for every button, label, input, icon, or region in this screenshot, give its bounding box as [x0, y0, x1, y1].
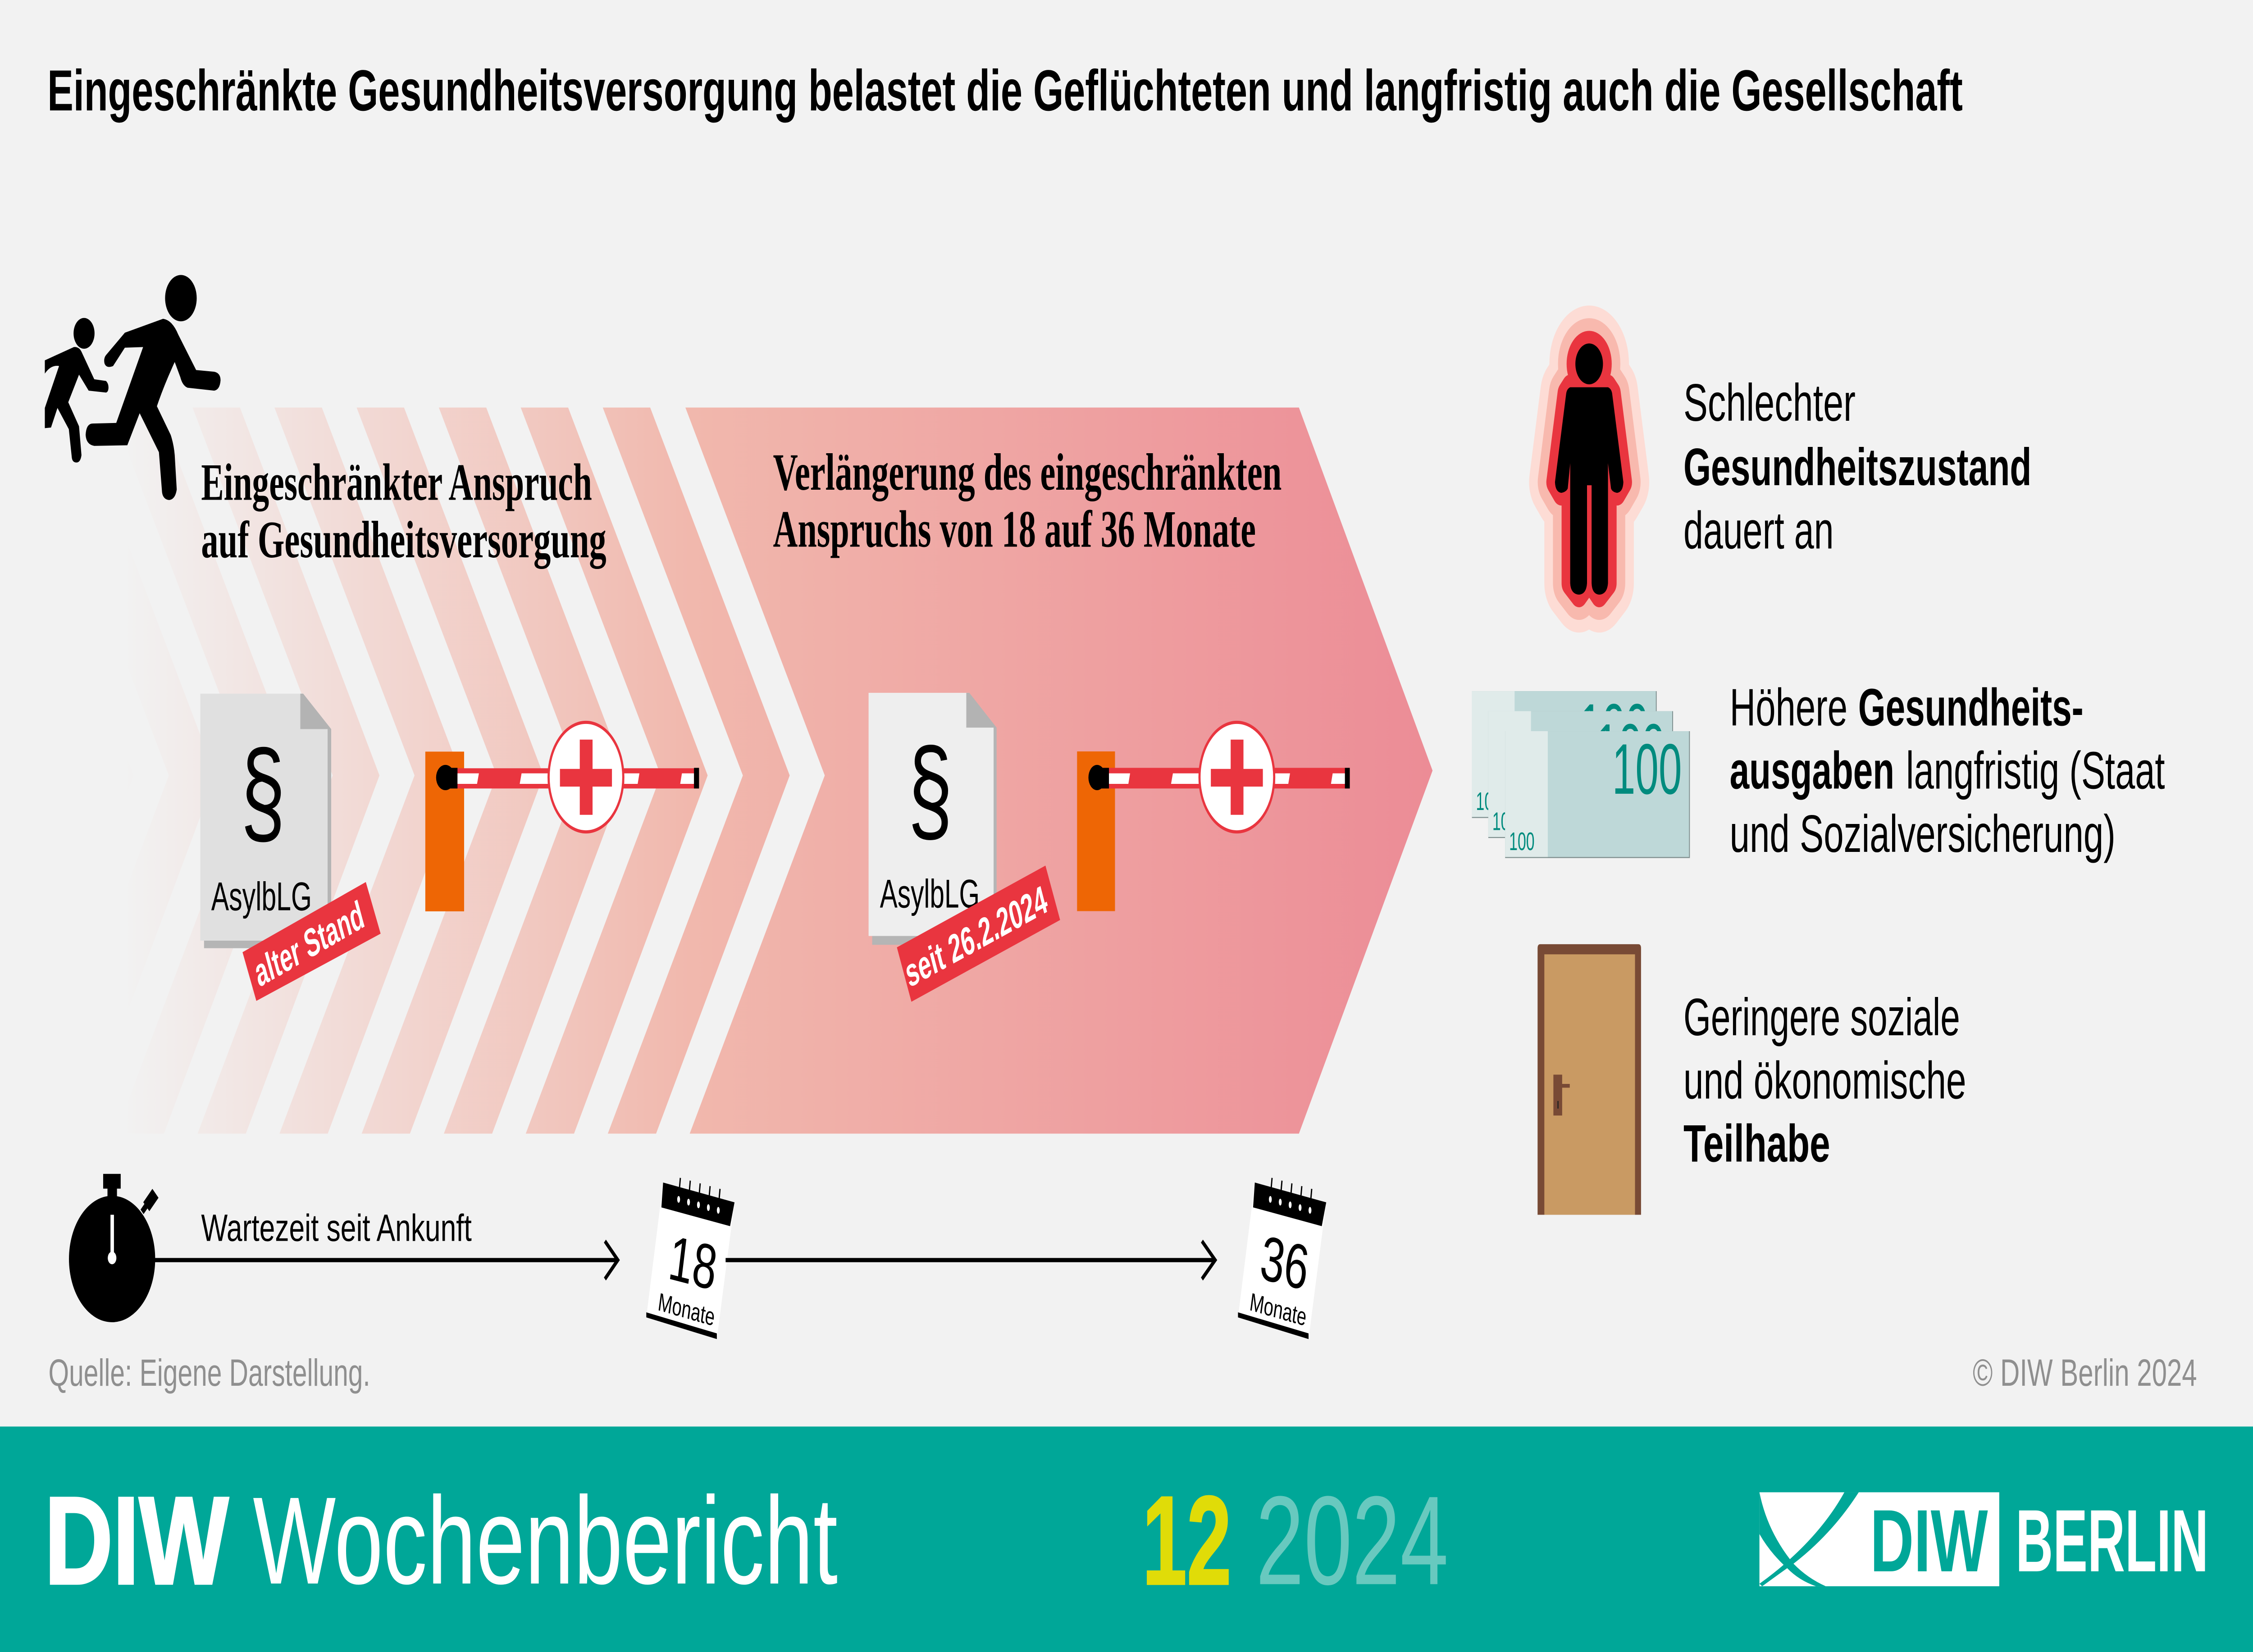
banknote front: 100 — [1509, 828, 1535, 856]
icon: barrier with red cross old — [425, 722, 699, 911]
text: social participation: Geringere soziale — [1683, 988, 1960, 1047]
main arrow: extension period — [685, 408, 1432, 1133]
issue number: 12 — [1142, 1470, 1231, 1611]
text: health expenditure — [1730, 678, 2165, 864]
text: social participation: und ökonomische — [1683, 1051, 1966, 1110]
text: social participation — [1683, 988, 1966, 1173]
logo: DIW Berlin — [1760, 1491, 2208, 1590]
heading: extension of restricted entitlement: Verlängerung des eingeschränkten — [773, 443, 1282, 501]
banknote front: 100 — [1612, 729, 1682, 809]
footer bar — [0, 1427, 2253, 1652]
year: 2024 — [1256, 1470, 1448, 1611]
icon: person with red glow — [1555, 343, 1624, 595]
text: health status — [1683, 373, 2031, 560]
banknote back: 100 — [1476, 788, 1501, 816]
banknote back — [1472, 689, 1657, 818]
icon: calendar 18 months: 18 — [665, 1222, 721, 1304]
text: social participation: Teilhabe — [1683, 1114, 1830, 1173]
text: health expenditure: Höhere — [1730, 678, 1847, 737]
icon: calendar 36 months: Monate — [1248, 1288, 1308, 1332]
heading: extension of restricted entitlement — [773, 443, 1282, 558]
icon: calendar 36 months: 36 — [1257, 1222, 1313, 1304]
text: health status: Schlechter — [1683, 373, 1856, 432]
copyright: © DIW Berlin 2024 — [1973, 1352, 2197, 1394]
icon: door — [1537, 944, 1641, 1215]
icon: calendar 36 months — [1238, 1178, 1326, 1339]
publication name: Wochenbericht — [253, 1471, 838, 1611]
banknote middle: 100 — [1492, 808, 1518, 836]
text: health expenditure: Gesundheits- — [1858, 678, 2084, 737]
icon: stopwatch — [69, 1174, 159, 1322]
label: waiting time: Wartezeit seit Ankunft — [201, 1207, 472, 1249]
icon: calendar 18 months: Monate — [657, 1288, 716, 1332]
heading: restricted entitlement: Eingeschränkter Anspruch — [201, 453, 592, 511]
heading: restricted entitlement: auf Gesundheitsversorgung — [201, 510, 607, 569]
banknote back: 100 — [1579, 689, 1649, 769]
banknote front — [1505, 729, 1690, 858]
icon: banknotes — [1472, 689, 1690, 858]
badge: seit 26.2.2024: seit 26.2.2024 — [901, 877, 1051, 996]
arrow: to 18 months — [151, 1241, 618, 1279]
icon: law document new — [869, 693, 997, 945]
text: health expenditure: und Sozialversicherung) — [1730, 805, 2116, 864]
title: Eingeschränkte Gesundheitsversorgung belastet die Geflüchteten und langfristig auch die Gesellschaft — [47, 58, 1963, 123]
arrow: to 36 months — [725, 1241, 1215, 1279]
banknote middle: 100 — [1595, 709, 1665, 789]
text: health status: Gesundheitszustand — [1683, 438, 2031, 497]
icon: law document new: AsylbLG — [880, 872, 980, 916]
badge: alter Stand: alter Stand — [250, 892, 368, 996]
icon: law document old — [201, 694, 331, 948]
text: health expenditure: ausgaben — [1730, 742, 1894, 800]
icon: fleeing adult and child — [45, 275, 220, 500]
source note: Quelle: Eigene Darstellung. — [48, 1352, 370, 1394]
icon: law document old: AsylbLG — [211, 874, 312, 919]
icon: barrier with red cross new — [1077, 722, 1350, 911]
chevron stripes: fading waiting period — [0, 408, 790, 1133]
heading: restricted entitlement — [201, 453, 607, 569]
publication name: DIW — [45, 1471, 228, 1611]
banknote middle — [1488, 709, 1673, 838]
text: health status: dauert an — [1683, 501, 1834, 560]
text: health expenditure: langfristig (Staat — [1906, 742, 2165, 800]
icon: calendar 18 months — [646, 1178, 734, 1339]
logo: DIW Berlin: DIW — [1870, 1491, 1988, 1590]
logo: DIW Berlin: BERLIN — [2016, 1491, 2208, 1590]
icon: law document new: § — [908, 724, 953, 856]
heading: extension of restricted entitlement: Anspruchs von 18 auf 36 Monate — [773, 500, 1256, 558]
icon: law document old: § — [241, 725, 285, 858]
